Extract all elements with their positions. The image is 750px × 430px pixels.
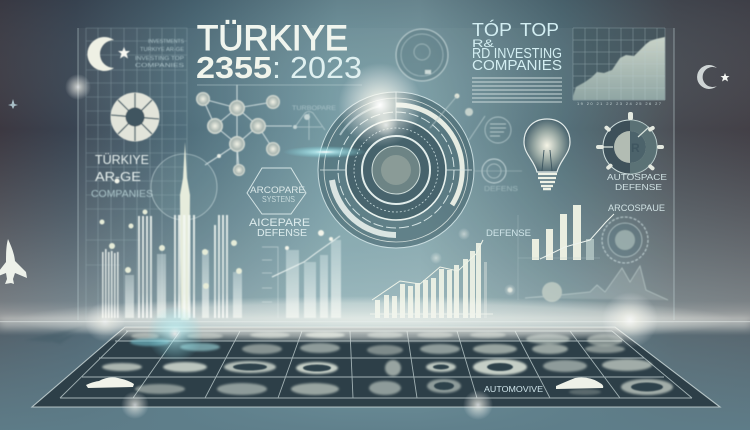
gauge: small top ring [396,29,448,81]
small star sparkle [8,99,18,109]
text: top R&D investing companies: COMPANIES [472,58,562,74]
tower and skyline bar chart [100,142,242,320]
pie chart [110,92,160,142]
icon: white car left [86,377,134,388]
text: aerospace defense [249,217,310,239]
area chart: top right [573,28,665,106]
table edge highlight [32,327,720,407]
plane icon [0,239,27,284]
hexagon badge: aerospace [247,168,306,214]
icon: Turkish crescent and star [87,37,130,71]
text: top R&D investing companies: TOP [520,20,559,40]
dial icon: R [631,141,640,155]
horizon light band [0,296,750,344]
table logos [102,332,673,395]
light flares [65,63,658,420]
title: TÜRKIYE [197,19,348,58]
text: Türkiye Ar-Ge companies: AR-GE [95,170,141,184]
dial icon [596,112,664,174]
rising bar chart: bright centre [370,240,493,318]
hexagon badge: aerospace: SYSTENS [262,195,295,204]
text: right aerospace defense labels: AUTOSPACE [607,172,667,182]
icon: small defense target [475,159,522,193]
area chart: top right: 19 20 21 22 23 24 25 26 27 [577,101,662,106]
text: top R&D investing companies: RD INVESTING [472,46,562,62]
central concentric rings seal [318,92,474,248]
text: aerospace defense: DEFENSE [257,227,307,239]
small caption lines: TURKIYE AR-GE [140,47,184,53]
text: right aerospace defense labels [607,172,667,213]
title: : 2023 [272,50,362,85]
left panel [86,28,187,320]
floor shadow streaks [25,326,85,344]
text: right aerospace defense labels: DEFENSE [615,182,662,192]
icon: right crescent and star [697,65,730,89]
faded line chart with orb [508,266,668,302]
small caption lines: INVESTING TOP [135,56,184,62]
text: top R&D investing companies: TÓP [472,19,512,40]
text: automotive label: AUTOMOVIVE [484,385,543,394]
table top wash [105,327,635,342]
title [196,19,362,85]
small schematic: turboprare [292,105,337,140]
title: 2355 [196,50,272,85]
bar chart: upper right [518,205,614,300]
grid [86,28,187,320]
small schematic: turboprare: TURBOPARE [292,105,337,112]
panel frame: glass backdrop [78,28,674,323]
small caption lines [135,39,184,69]
text: top R&D investing companies: R& [472,38,495,50]
table grid [60,331,692,398]
small caption lines: INVESTMENTS [148,39,184,45]
line and bar chart: centre-left [262,230,341,318]
company logo table [32,327,720,407]
text: Türkiye Ar-Ge companies: COMPANIES [91,189,153,200]
icon: small defense target: DEFENS [484,186,518,193]
text: Türkiye Ar-Ge companies: TÜRKIYE [95,153,149,167]
text: aerospace defense: AICEPARE [249,217,310,229]
ring emblem [602,217,648,263]
text: defense centre-right: DEFENSE [486,228,531,239]
icon: light bulb [524,119,570,189]
text: right aerospace defense labels: ARCOSPAUE [608,203,665,213]
molecule network diagram [114,85,292,184]
tower [180,142,190,320]
text: Türkiye Ar-Ge companies [91,153,153,200]
text: top R&D investing companies [472,19,562,102]
small diagram: report gauge [430,94,511,143]
icon: white car right [556,378,603,389]
small caption lines: COMPANIES [135,63,184,69]
hexagon badge: aerospace: ARCOPARE [250,185,305,196]
